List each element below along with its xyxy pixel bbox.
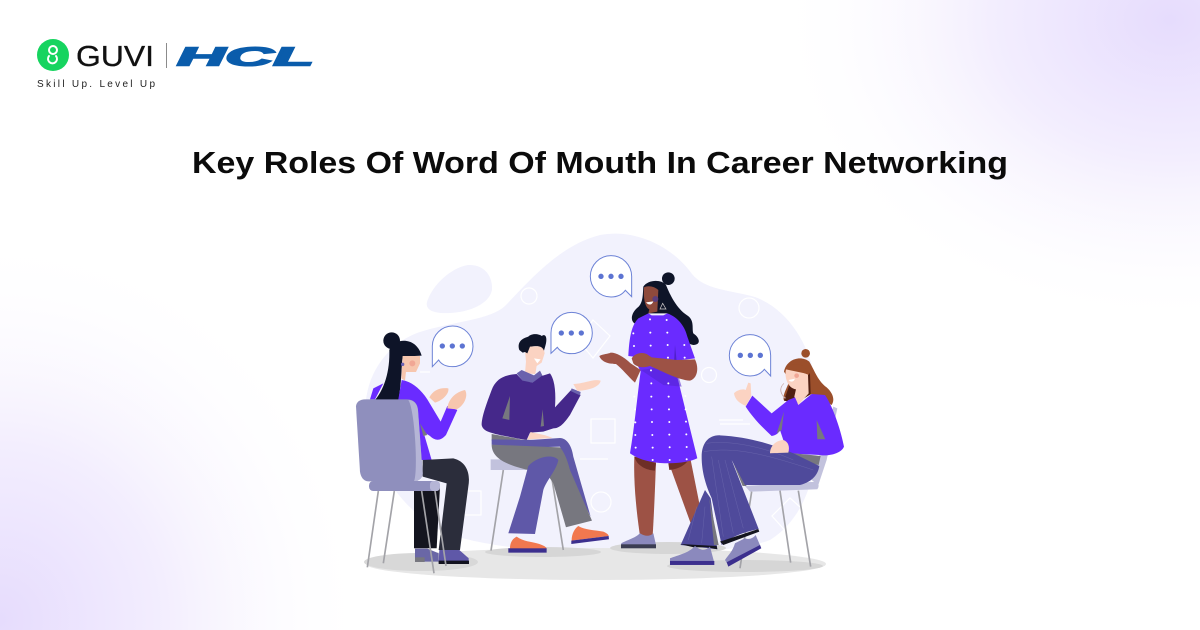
background blob (366, 234, 819, 554)
tagline: Skill Up. Level Up (37, 79, 155, 90)
speech bubble: person 1 (432, 326, 473, 367)
decorative outlines (420, 288, 810, 536)
icon: GUVI green circle (37, 39, 69, 71)
HCL wordmark: HCL (177, 42, 314, 72)
speech bubble: person 4 (729, 335, 771, 376)
person 1: seated woman with chair (356, 332, 469, 573)
GUVI wordmark: GUVI (76, 41, 154, 73)
person 2: seated man (482, 334, 609, 553)
person 4: seated woman (670, 349, 844, 568)
title: Key Roles Of Word Of Mouth In Career Networking (192, 145, 1008, 180)
speech bubble: person 3 (590, 256, 632, 297)
illustration: team conversation (356, 234, 844, 580)
person 3: standing woman (599, 272, 700, 548)
logo: GUVI and HCL (37, 39, 314, 90)
speech bubble: person 2 (551, 312, 592, 354)
trousers (681, 435, 819, 549)
ground shadow (364, 542, 826, 580)
